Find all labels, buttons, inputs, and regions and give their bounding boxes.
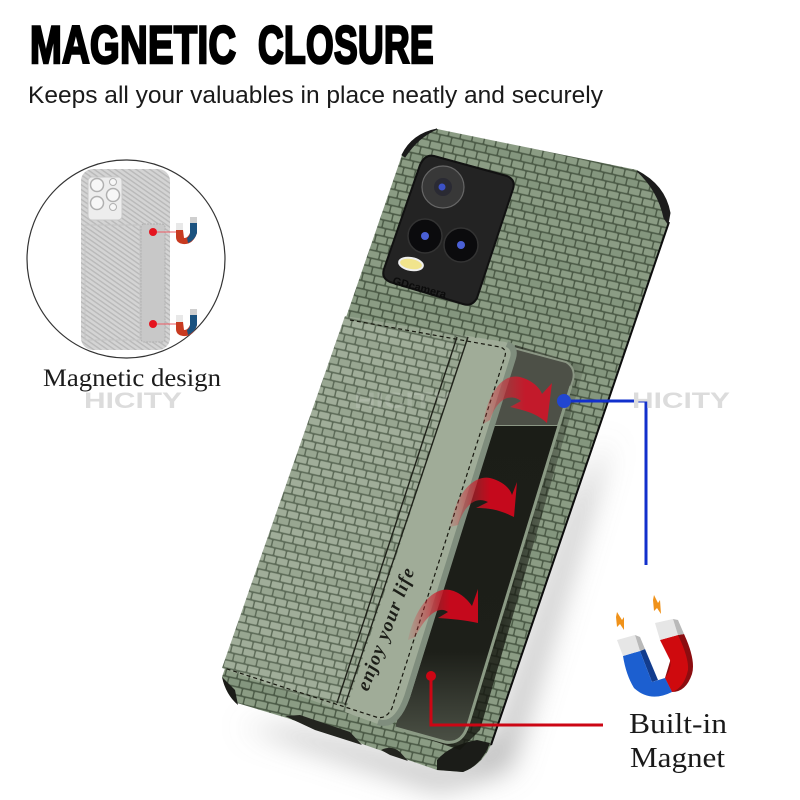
inset phone drawing	[81, 169, 170, 350]
arrow: top	[483, 376, 552, 424]
title: MAGNETIC	[30, 15, 236, 74]
card sleeve	[222, 316, 516, 725]
card recess right band shading	[395, 345, 585, 750]
case body	[222, 129, 670, 772]
faint central watermark: HICITY	[354, 388, 452, 413]
case outer edge	[491, 222, 669, 745]
corner bumper: top right	[637, 171, 670, 224]
phone drop shadow	[240, 440, 610, 790]
spark: left	[616, 612, 624, 630]
charging port	[285, 715, 362, 745]
subtitle: Keeps all your valuables in place neatly and securely	[28, 82, 603, 109]
inset circle	[27, 160, 225, 358]
slot right rim	[395, 386, 571, 742]
open card slot, black lower	[395, 426, 558, 742]
label: built-in magnet	[629, 708, 728, 774]
left pole tip	[617, 635, 640, 656]
camera module	[383, 156, 514, 305]
speaker port	[381, 748, 408, 761]
watermark: left: HICITY	[84, 388, 182, 413]
upper magnet callout	[149, 217, 197, 244]
leather strip	[345, 337, 516, 725]
flash	[398, 256, 424, 272]
phone case	[222, 129, 670, 772]
left lens	[408, 219, 442, 253]
arrow: middle	[450, 478, 517, 527]
right pole tip	[655, 619, 678, 640]
sleeve rim	[378, 344, 514, 723]
arrow: bottom	[408, 589, 478, 640]
engraved text: enjoy your life	[353, 564, 420, 694]
blue arm	[623, 651, 672, 697]
main lens	[422, 166, 464, 208]
callout: blue magnet pointer	[557, 394, 646, 565]
red arm	[660, 635, 688, 692]
inset caption: Magnetic design	[43, 365, 222, 392]
strip stitching	[337, 337, 468, 705]
blue side shade	[640, 649, 658, 682]
callout: red magnet pointer	[426, 671, 603, 725]
spark: right	[653, 595, 661, 614]
corner bumper: bottom right	[437, 740, 490, 772]
corner bumper: top left	[402, 129, 437, 157]
red side shade	[665, 634, 693, 692]
label: built-in magnet: Magnet	[630, 742, 725, 774]
camera label: GDcamera	[391, 275, 448, 301]
label: built-in magnet: Built-in	[629, 708, 728, 740]
panel: magnetic design inset	[27, 160, 225, 392]
title	[30, 15, 434, 75]
icon: horseshoe magnet	[616, 595, 693, 697]
lower magnet callout	[149, 309, 197, 336]
watermark: right: HICITY	[632, 388, 730, 413]
corner bumper: bottom left	[222, 677, 238, 705]
open card slot, translucent top	[488, 347, 574, 426]
stitching	[224, 320, 505, 718]
right lens	[444, 228, 478, 262]
title: CLOSURE	[258, 15, 434, 75]
